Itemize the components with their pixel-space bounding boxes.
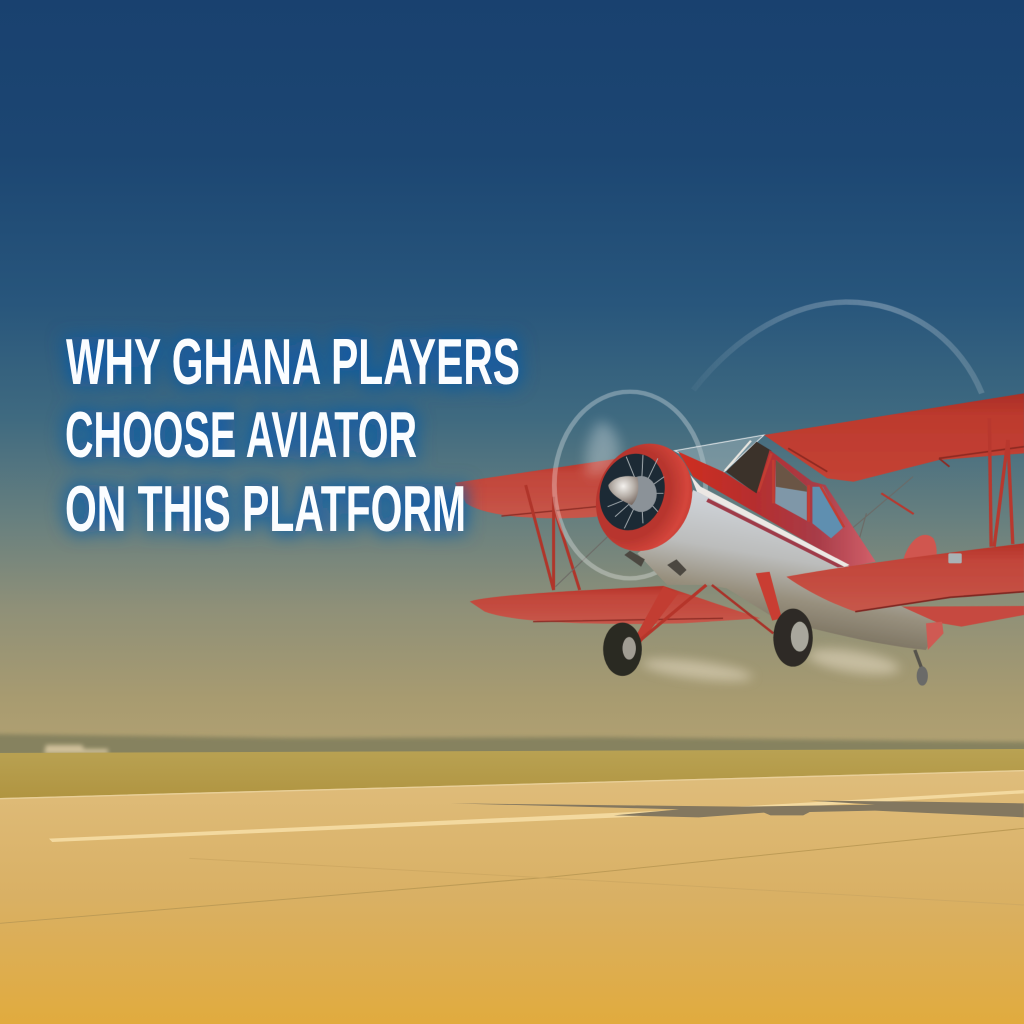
far lower wing: [470, 586, 760, 624]
runway edge line: [0, 771, 1024, 799]
right wheel: [773, 609, 813, 667]
near upper wing: [764, 393, 1024, 482]
red upper fuselage: [678, 450, 876, 567]
headline glow: CHOOSE AVIATOR: [65, 398, 417, 471]
far wing rib detail: [501, 507, 723, 622]
headline: [65, 325, 520, 545]
right wheel hub: [791, 622, 809, 652]
sky background: [0, 0, 1024, 760]
cabin frame: [725, 441, 751, 471]
cabin interior: [726, 442, 771, 494]
smoke trails: [640, 644, 901, 686]
runway: [0, 770, 1024, 1024]
left landing gear: [603, 585, 706, 676]
headline glow: [65, 325, 520, 545]
right gear leg: [756, 572, 782, 621]
engine hub: [625, 476, 657, 512]
far upper wing: [455, 458, 619, 518]
left gear strut: [632, 585, 706, 647]
headline: ON THIS PLATFORM: [65, 472, 466, 545]
wing lamp: [948, 553, 962, 563]
propeller ring: [554, 392, 706, 578]
plane shadow: [451, 801, 1024, 817]
tail wheel strut: [915, 650, 922, 670]
runway details: [0, 771, 1024, 923]
propeller spinner: [608, 476, 638, 505]
cowling: [584, 434, 705, 560]
grass field: [0, 749, 1024, 800]
cabin glass: [675, 435, 764, 473]
tail wheel tyre: [917, 666, 928, 686]
left wheel: [603, 623, 642, 676]
pavement seam: [189, 858, 1024, 905]
engine exhaust: [624, 551, 687, 576]
distant buildings: [44, 745, 108, 754]
fuselage stripes: [690, 475, 850, 567]
tailplane: [902, 606, 1024, 627]
side window front: [775, 460, 807, 521]
left gear leg: [630, 586, 678, 647]
biplane: [455, 302, 1024, 686]
near upper wing under detail: [788, 447, 1024, 472]
right gear strut: [712, 585, 773, 633]
fuselage: [637, 490, 939, 650]
cabin pillars: [758, 453, 844, 527]
near wing struts: [989, 418, 1013, 547]
near lower wing trailing detail: [855, 592, 1024, 612]
engine opening: [592, 448, 672, 536]
pavement crack: [0, 828, 1024, 923]
left wheel hub: [622, 637, 636, 660]
centre line: [49, 790, 1024, 842]
propeller blade blur: [586, 420, 619, 477]
right landing gear: [712, 572, 813, 667]
side window front interior: [776, 460, 807, 492]
headline glow: ON THIS PLATFORM: [65, 472, 466, 545]
side window rear: [812, 487, 844, 538]
headline: CHOOSE AVIATOR: [65, 398, 417, 471]
headline: WHY GHANA PLAYERS: [66, 325, 520, 398]
far wing struts: [526, 485, 580, 590]
bracing wires: [555, 477, 913, 587]
distant tree line: [0, 734, 1024, 756]
tail wheel: [915, 650, 928, 686]
near lower wing: [786, 543, 1024, 612]
large propeller halo arc: [693, 302, 982, 393]
radial engine fins: [608, 455, 664, 528]
tail fin: [904, 535, 937, 560]
loose strut: [881, 493, 914, 514]
headline glow: WHY GHANA PLAYERS: [66, 325, 520, 398]
rudder: [926, 622, 943, 650]
